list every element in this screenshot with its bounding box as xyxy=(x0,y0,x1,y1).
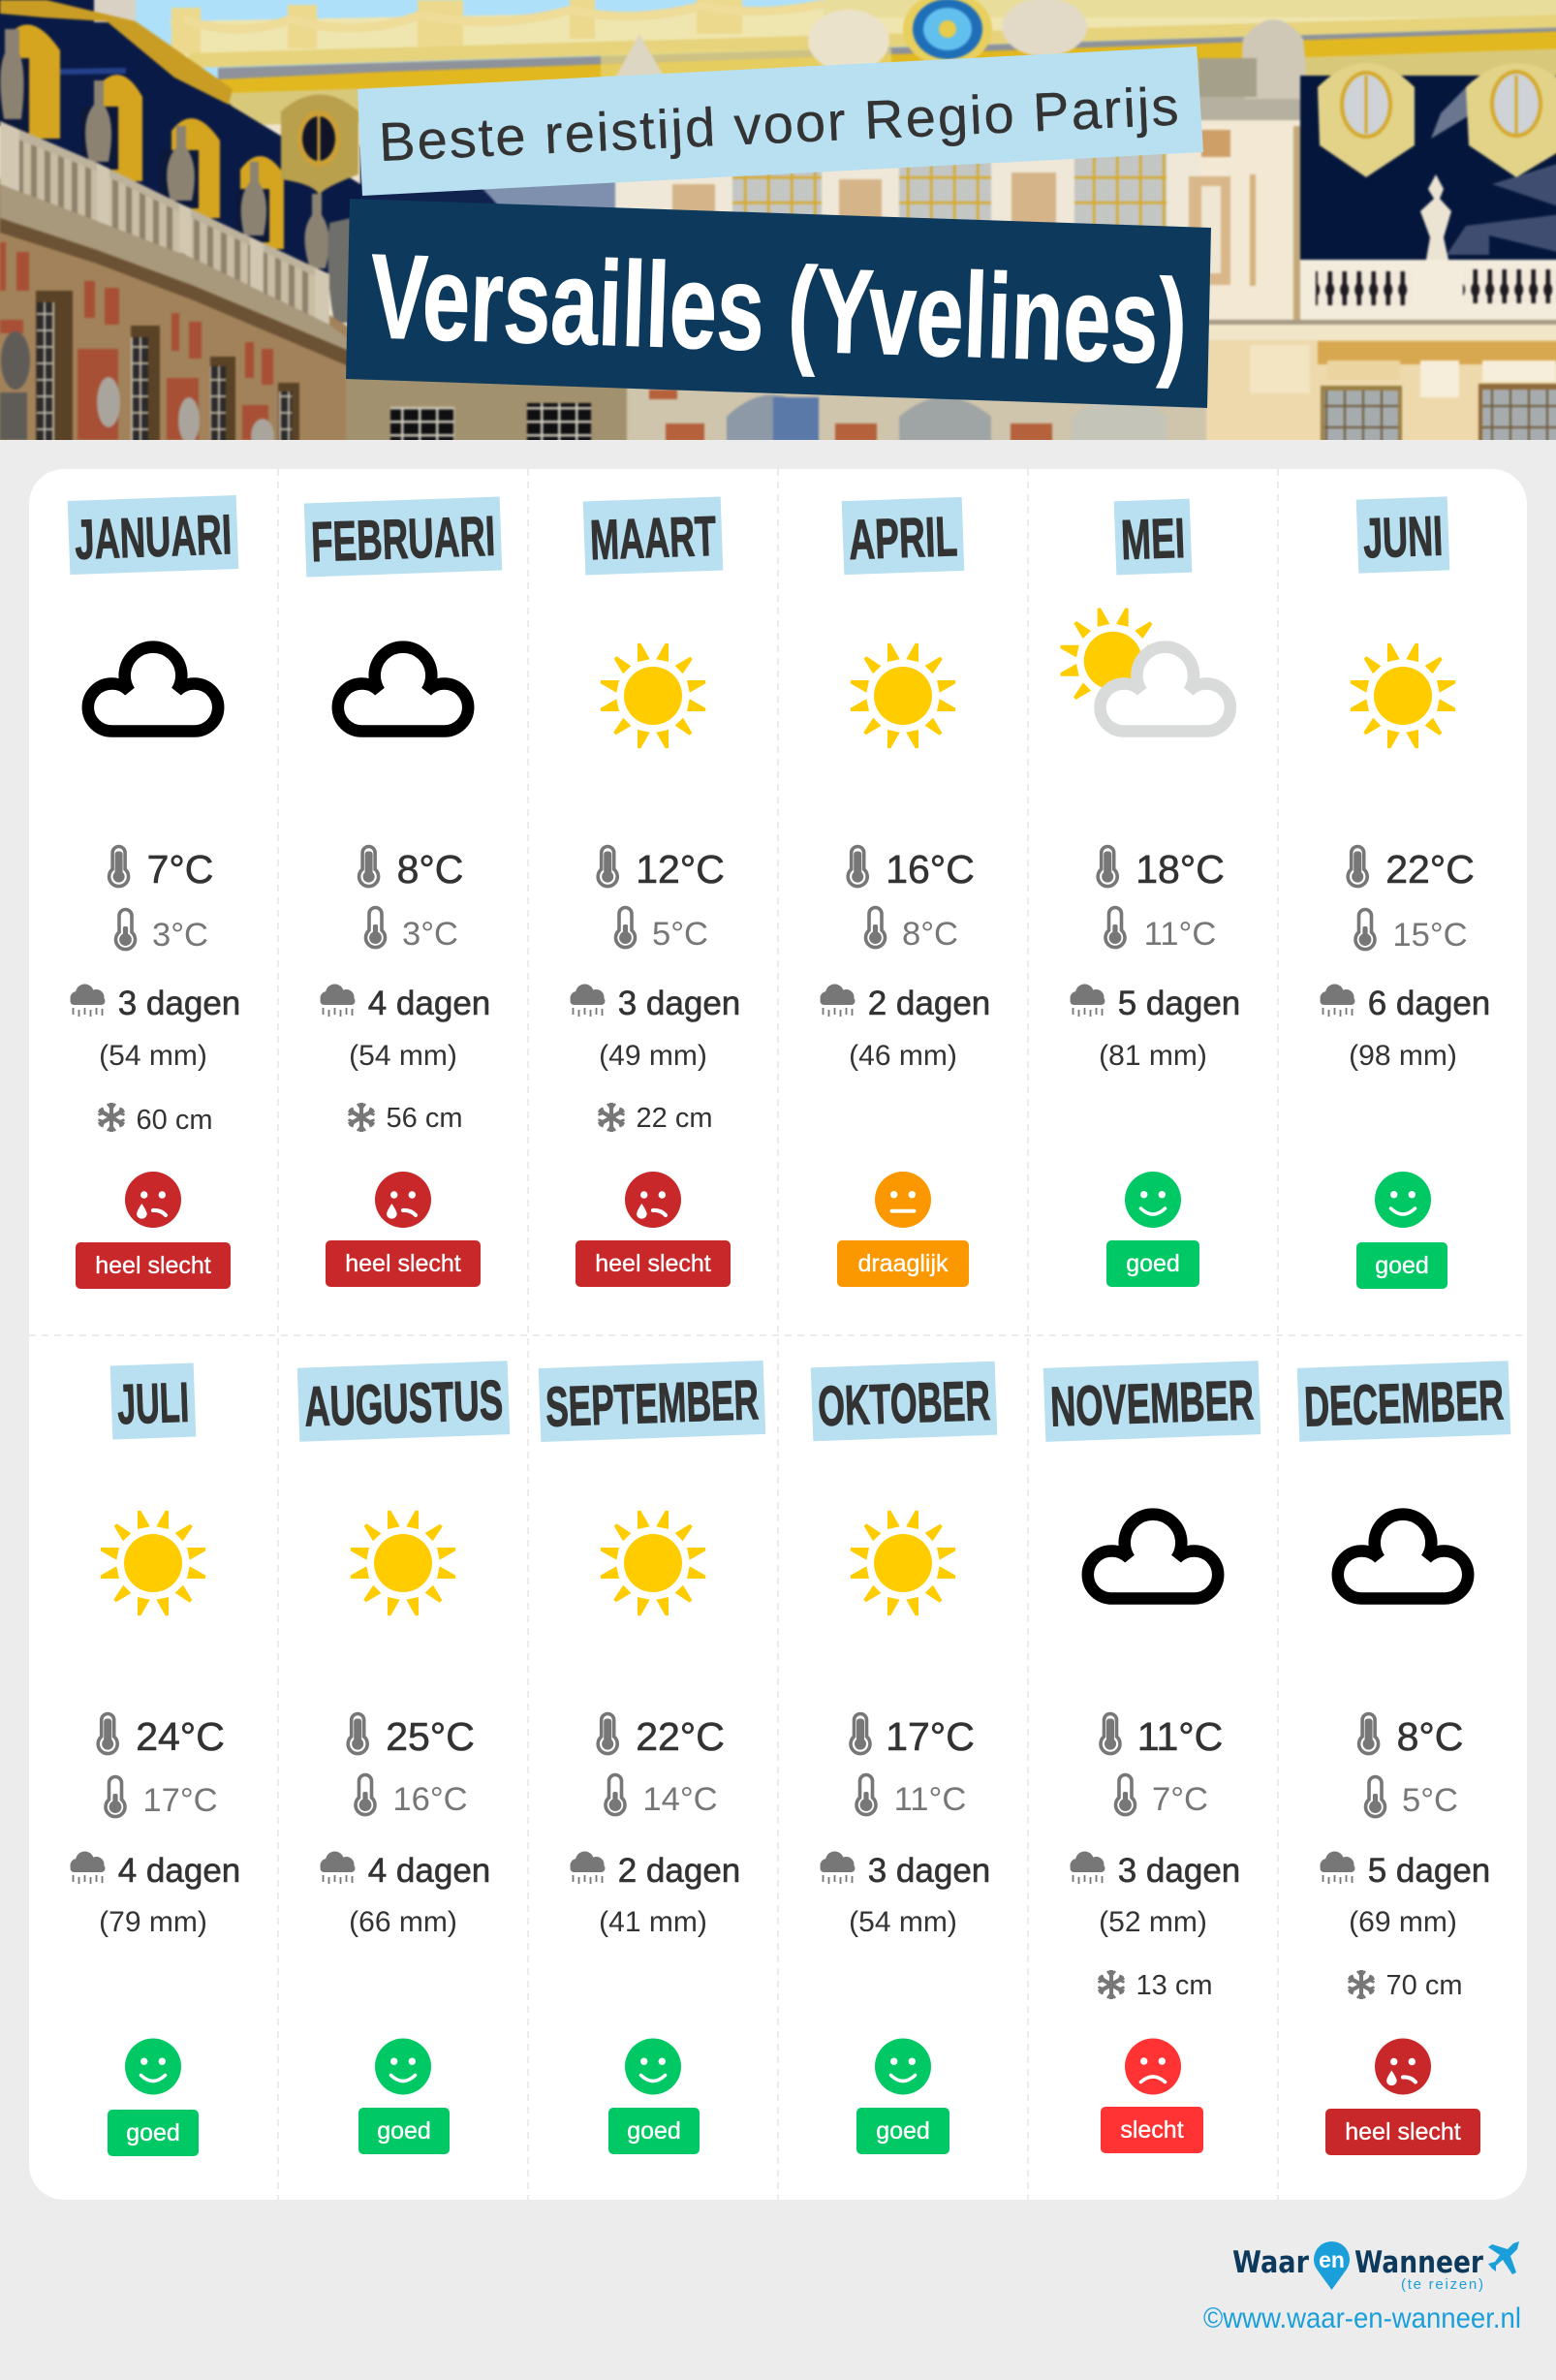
min temperature xyxy=(856,1775,966,1818)
icon: rating face xyxy=(375,2039,431,2095)
month label xyxy=(297,1361,510,1442)
hero photo: palace of Versailles xyxy=(0,0,1556,455)
icon: plane xyxy=(1488,2241,1519,2274)
snow: 70 cm xyxy=(1386,1970,1462,2001)
month label: NOVEMBER xyxy=(1049,1368,1255,1439)
subtitle banner: Beste reistijd voor Regio Parijs xyxy=(378,76,1180,172)
min temperature: 5°C xyxy=(1402,1782,1458,1819)
rating badge xyxy=(856,2108,949,2154)
icon: rating face xyxy=(1375,1172,1431,1228)
rain days: 3 dagen xyxy=(1118,1852,1240,1890)
rating badge xyxy=(326,1240,481,1287)
rain days: 4 dagen xyxy=(368,1852,490,1890)
month label: JANUARI xyxy=(74,503,233,572)
rainfall: (98 mm) xyxy=(1349,1040,1457,1072)
min temperature: 8°C xyxy=(902,916,958,953)
rating badge xyxy=(76,1242,231,1289)
icon: rating face xyxy=(625,1172,681,1228)
snow: 22 cm xyxy=(637,1103,712,1134)
rating badge xyxy=(108,2110,199,2156)
subtitle banner xyxy=(358,47,1203,196)
min temperature: 7°C xyxy=(1152,1781,1208,1818)
max temperature: 12°C xyxy=(636,847,725,892)
icon: cloud xyxy=(338,647,468,731)
rain days: 3 dagen xyxy=(118,985,240,1022)
month label: JULI xyxy=(116,1371,190,1436)
rain days: 4 dagen xyxy=(368,985,490,1022)
rainfall: (49 mm) xyxy=(599,1040,707,1072)
month label: AUGUSTUS xyxy=(303,1368,504,1439)
max temperature: 8°C xyxy=(1397,1714,1463,1759)
min temperature: 14°C xyxy=(642,1781,718,1818)
icon: sun xyxy=(851,643,955,748)
max temperature xyxy=(1098,847,1225,892)
month label xyxy=(1114,499,1192,575)
panel: oktober xyxy=(811,1362,997,2154)
rainfall: (52 mm) xyxy=(1099,1906,1207,1938)
snow: 60 cm xyxy=(137,1105,212,1136)
rainfall: (41 mm) xyxy=(599,1906,707,1938)
rating badge: goed xyxy=(1126,1250,1180,1277)
panel: juni xyxy=(1320,496,1490,1289)
max temperature: 25°C xyxy=(386,1714,475,1759)
rating badge xyxy=(1325,2109,1480,2155)
max temperature xyxy=(109,847,213,892)
month label xyxy=(1043,1361,1260,1442)
min temperature xyxy=(116,909,208,954)
rainfall: (54 mm) xyxy=(349,1040,457,1072)
max temperature xyxy=(1359,1713,1463,1759)
icon: sun xyxy=(851,1511,955,1615)
panel: februari xyxy=(304,496,502,1287)
month label xyxy=(842,497,964,575)
rating badge: heel slecht xyxy=(95,1252,211,1279)
snow: 13 cm xyxy=(1136,1970,1212,2001)
title banner: Versailles (Yvelines) xyxy=(368,230,1189,390)
month label: APRIL xyxy=(848,505,958,572)
logo: Waar en Wanneer: Wanneer xyxy=(1354,2245,1484,2280)
max temperature: 24°C xyxy=(136,1714,225,1759)
icon: map pin: en xyxy=(1319,2247,1345,2272)
min temperature: 16°C xyxy=(392,1781,468,1818)
icon: rating face xyxy=(875,1172,931,1228)
rating badge xyxy=(1101,2107,1203,2153)
min temperature: 11°C xyxy=(894,1781,966,1818)
icon: rating face xyxy=(125,1172,181,1228)
rating badge: heel slecht xyxy=(1345,2118,1461,2145)
rain days: 5 dagen xyxy=(1368,1852,1490,1890)
rating badge: goed xyxy=(377,2117,431,2145)
min temperature xyxy=(1355,909,1468,954)
max temperature: 7°C xyxy=(147,847,213,892)
month label: SEPTEMBER xyxy=(545,1368,760,1439)
max temperature: 22°C xyxy=(636,1714,725,1759)
rain days: 3 dagen xyxy=(868,1852,990,1890)
month label: OKTOBER xyxy=(817,1369,991,1438)
snow xyxy=(599,1103,712,1134)
panel: maart xyxy=(570,497,740,1287)
logo: Waar en Wanneer: (te reizen) xyxy=(1401,2276,1483,2293)
icon: sun xyxy=(101,1511,205,1615)
rain days: 6 dagen xyxy=(1368,985,1490,1022)
min temperature xyxy=(606,1775,718,1818)
month label xyxy=(304,496,502,578)
icon: rating face xyxy=(1125,1172,1181,1228)
min temperature xyxy=(1366,1777,1458,1819)
rating badge xyxy=(1106,1240,1199,1287)
rating badge xyxy=(358,2108,450,2154)
min temperature xyxy=(356,1775,468,1818)
logo: Waar en Wanneer: Waar xyxy=(1232,2245,1310,2280)
month label xyxy=(811,1362,997,1441)
min temperature: 17°C xyxy=(142,1782,218,1819)
rain days: 4 dagen xyxy=(118,1852,240,1890)
icon: sun behind cloud xyxy=(1060,608,1230,731)
max temperature: 16°C xyxy=(886,847,975,892)
max temperature xyxy=(1348,847,1475,892)
month label xyxy=(110,1363,196,1439)
month label: MEI xyxy=(1120,507,1186,572)
icon: sun xyxy=(351,1511,455,1615)
min temperature xyxy=(1105,907,1216,953)
panel: januari xyxy=(68,495,240,1289)
panel: augustus xyxy=(297,1361,510,2154)
min temperature xyxy=(1116,1775,1208,1818)
max temperature xyxy=(598,847,725,892)
icon: sun xyxy=(1351,643,1455,748)
rainfall: (81 mm) xyxy=(1099,1040,1207,1072)
rating badge: goed xyxy=(876,2117,930,2145)
max temperature xyxy=(848,847,975,892)
panel: september xyxy=(539,1361,765,2154)
panel: mei xyxy=(1060,499,1240,1287)
max temperature xyxy=(348,1713,475,1759)
icon: map pin xyxy=(1314,2241,1350,2290)
rainfall: (46 mm) xyxy=(849,1040,957,1072)
rating badge: heel slecht xyxy=(345,1250,461,1277)
min temperature xyxy=(366,907,458,953)
rain days: 2 dagen xyxy=(618,1852,740,1890)
max temperature: 17°C xyxy=(886,1714,975,1759)
max temperature xyxy=(359,847,463,892)
min temperature: 11°C xyxy=(1144,916,1216,953)
icon: rating face xyxy=(1375,2039,1431,2095)
max temperature xyxy=(1101,1713,1223,1759)
rainfall: (66 mm) xyxy=(349,1906,457,1938)
rating badge: heel slecht xyxy=(595,1250,711,1277)
logo: Waar en Wanneer xyxy=(1232,2241,1519,2293)
rain days: 5 dagen xyxy=(1118,985,1240,1022)
title banner xyxy=(346,199,1211,408)
icon: rating face xyxy=(1125,2039,1181,2095)
icon: sun xyxy=(601,1511,705,1615)
month label xyxy=(539,1361,765,1442)
icon: rating face xyxy=(125,2039,181,2095)
rainfall: (54 mm) xyxy=(99,1040,207,1072)
rain days: 2 dagen xyxy=(868,985,990,1022)
icon: cloud xyxy=(1338,1515,1468,1599)
month label: JUNI xyxy=(1362,505,1444,570)
month label: MAART xyxy=(589,505,717,572)
rating badge xyxy=(608,2108,700,2154)
panel: juli xyxy=(70,1363,240,2156)
month label: FEBRUARI xyxy=(310,505,496,574)
min temperature: 5°C xyxy=(652,916,708,953)
month label xyxy=(1356,496,1449,574)
min temperature: 3°C xyxy=(152,917,208,954)
rating badge: goed xyxy=(1375,1252,1429,1279)
rating badge: goed xyxy=(627,2117,681,2145)
max temperature: 11°C xyxy=(1137,1714,1223,1759)
rainfall: (54 mm) xyxy=(849,1906,957,1938)
max temperature: 22°C xyxy=(1385,847,1475,892)
min temperature xyxy=(866,907,958,953)
rainfall: (79 mm) xyxy=(99,1906,207,1938)
min temperature xyxy=(106,1777,218,1819)
icon: rating face xyxy=(875,2039,931,2095)
snow xyxy=(1349,1970,1462,2001)
max temperature xyxy=(598,1713,725,1759)
rainfall: (69 mm) xyxy=(1349,1906,1457,1938)
rating badge: draaglijk xyxy=(857,1250,949,1277)
rating badge xyxy=(576,1240,731,1287)
snow: 56 cm xyxy=(387,1103,462,1134)
month label xyxy=(583,497,723,575)
min temperature: 3°C xyxy=(402,916,458,953)
max temperature: 18°C xyxy=(1136,847,1225,892)
panel: december xyxy=(1297,1361,1510,2155)
panel: april xyxy=(820,497,990,1287)
rating badge xyxy=(1356,1242,1447,1289)
icon: cloud xyxy=(1088,1515,1218,1599)
rating badge: goed xyxy=(126,2119,180,2146)
max temperature: 8°C xyxy=(397,847,463,892)
min temperature: 15°C xyxy=(1392,917,1468,954)
snow xyxy=(1099,1970,1212,2001)
snow xyxy=(349,1103,462,1134)
rating badge xyxy=(837,1240,969,1287)
website credit: ©www.waar-en-wanneer.nl xyxy=(1203,2302,1521,2334)
rating badge: slecht xyxy=(1120,2116,1184,2144)
icon: cloud xyxy=(88,647,218,731)
panel: november xyxy=(1043,1361,1260,2153)
panel: climate table xyxy=(29,469,1527,2200)
month label xyxy=(68,495,238,575)
min temperature xyxy=(616,907,708,953)
icon: sun xyxy=(601,643,705,748)
icon: rating face xyxy=(375,1172,431,1228)
snow xyxy=(99,1103,212,1136)
max temperature xyxy=(98,1713,225,1759)
icon: rating face xyxy=(625,2039,681,2095)
rain days: 3 dagen xyxy=(618,985,740,1022)
